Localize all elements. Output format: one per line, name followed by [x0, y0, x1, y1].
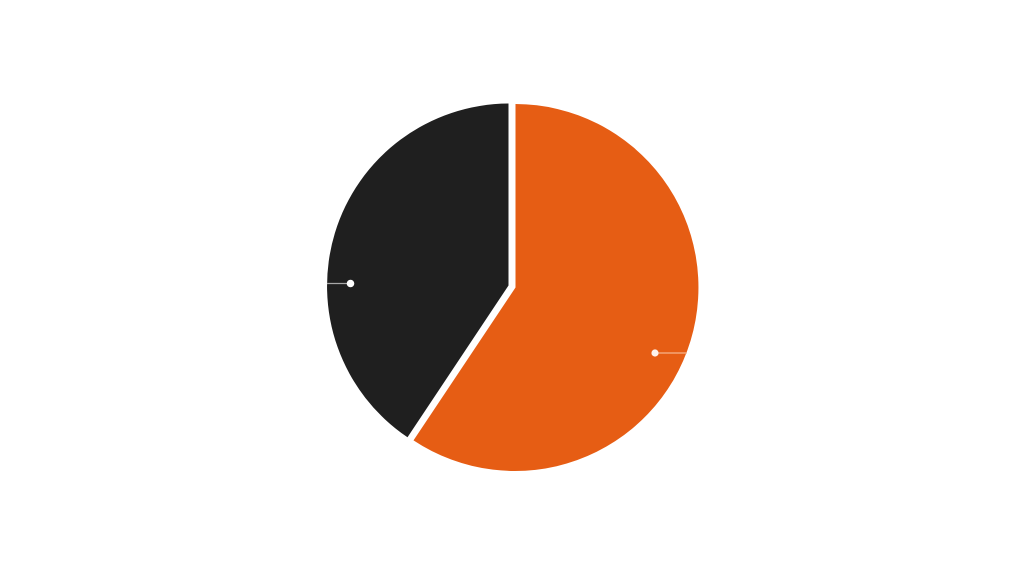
marker dot: black segment — [347, 280, 354, 287]
slice: black segment — [327, 104, 508, 437]
leader line: orange segment — [655, 352, 687, 354]
leader line: black segment — [327, 282, 350, 284]
marker dot: orange segment — [651, 349, 659, 357]
slice: orange segment — [414, 104, 698, 471]
